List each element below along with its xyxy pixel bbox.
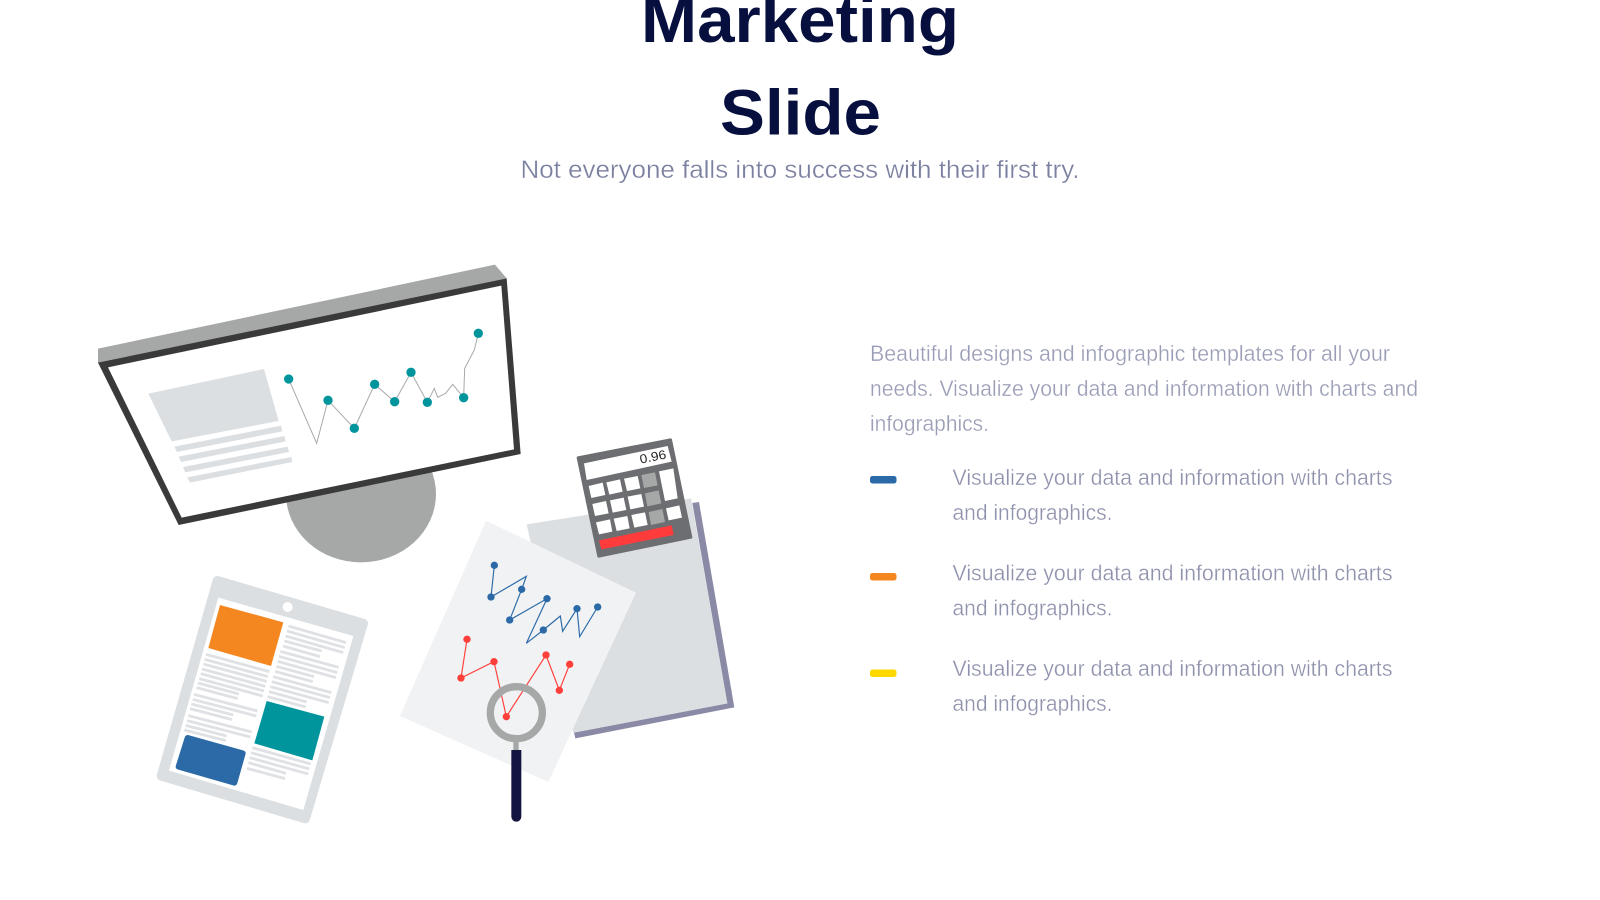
paper sheet [400,521,636,782]
subtitle: Not everyone falls into success with their first try. [520,156,1080,184]
blue item text: Visualize your data and information with charts [952,465,1392,490]
monitor stand base [286,426,436,562]
illustration: tablet [161,581,363,819]
blue item text: and infographics. [952,500,1112,525]
clipboard sheet [527,498,727,733]
red line chart [457,636,573,720]
intro paragraph: infographics. [870,411,989,436]
monitor top edge [98,265,507,363]
illustration: monitor [98,265,521,562]
orange item text: and infographics. [952,596,1112,620]
title: Slide [720,76,881,148]
list item: blue [870,465,1392,525]
yellow item text: and infographics. [952,691,1112,716]
blue item text [952,465,1392,525]
illustration: documents and calculator [400,440,734,822]
screen line chart [284,329,483,443]
tablet screen [169,598,353,810]
calculator: 0.96 [638,448,667,467]
orange item text: Visualize your data and information with charts [952,560,1392,586]
monitor screen [108,286,514,518]
orange dash [870,573,896,580]
tablet text lines [184,626,346,779]
blue dash [870,476,896,484]
magnifying glass [490,687,542,822]
orange block [208,605,283,666]
yellow item text: Visualize your data and information with charts [952,656,1392,681]
blue block [179,738,243,783]
list item: yellow [870,656,1392,716]
yellow item text [952,656,1392,716]
tablet body [161,581,363,819]
monitor frame [98,278,521,525]
teal block [254,701,324,760]
title [641,0,959,148]
blue line chart [487,562,601,643]
intro paragraph: Beautiful designs and infographic templates for all your [870,341,1390,366]
intro paragraph: needs. Visualize your data and information with charts and [870,376,1418,401]
list item: orange [870,560,1392,620]
screen text block [148,369,292,483]
intro paragraph [870,341,1418,436]
clipboard shadow edge [574,502,734,738]
orange item text [952,560,1392,620]
tablet camera [283,602,293,612]
calculator [578,440,691,556]
yellow dash [870,670,896,677]
